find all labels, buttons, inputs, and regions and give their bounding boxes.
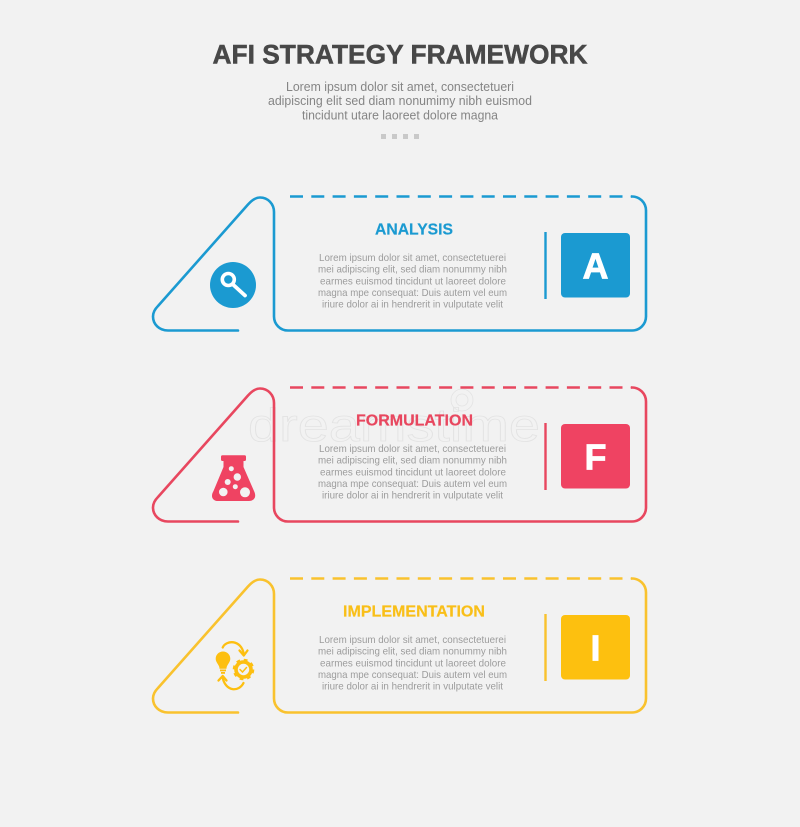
panel: implementation — [153, 578, 646, 712]
analysis heading: ANALYSIS — [375, 222, 453, 238]
implementation text: iriure dolor ai in hendrerit in vulputate velit — [322, 680, 503, 692]
formulation text — [318, 443, 507, 502]
analysis letter badge — [561, 233, 630, 298]
panel: analysis — [153, 196, 646, 330]
analysis text: magna mpe consequat: Duis autem vel eum — [318, 287, 507, 299]
icon: flask — [212, 455, 255, 501]
subtitle: tincidunt utare laoreet dolore magna — [302, 108, 498, 122]
formulation text: magna mpe consequat: Duis autem vel eum — [318, 478, 507, 490]
icon: idea and gear cycle — [216, 642, 253, 689]
formulation heading: FORMULATION — [356, 412, 473, 430]
implementation letter badge — [561, 615, 630, 680]
formulation text: earmes euismod tincidunt ut laoreet dolore — [320, 466, 506, 478]
implementation text: earmes euismod tincidunt ut laoreet dolore — [320, 658, 506, 670]
analysis text: Lorem ipsum dolor sit amet, consectetuerei — [319, 252, 506, 264]
analysis text: earmes euismod tincidunt ut laoreet dolore — [320, 276, 506, 288]
subtitle: Lorem ipsum dolor sit amet, consectetueri — [286, 80, 514, 94]
title ornament dots — [381, 134, 419, 139]
formulation divider — [544, 423, 547, 490]
icon: magnifying glass — [210, 262, 256, 308]
watermark: dreamstime — [248, 399, 540, 451]
subtitle: adipiscing elit sed diam nonumimy nibh euismod — [268, 94, 532, 108]
watermark — [248, 389, 540, 451]
subtitle — [268, 80, 532, 122]
implementation text: mei adipiscing elit, sed diam nonummy nibh — [318, 646, 507, 658]
implementation letter badge: I — [590, 628, 601, 668]
analysis text — [318, 252, 507, 310]
implementation text — [318, 634, 507, 692]
formulation text: iriure dolor ai in hendrerit in vulputate velit — [322, 490, 503, 502]
formulation outline — [153, 388, 646, 522]
formulation text: Lorem ipsum dolor sit amet, consectetuerei — [319, 443, 506, 455]
implementation divider — [544, 614, 547, 681]
formulation text: mei adipiscing elit, sed diam nonummy nibh — [318, 454, 507, 466]
cycle arrows — [218, 642, 248, 689]
formulation letter badge: F — [584, 436, 606, 478]
bulb — [216, 652, 230, 674]
gear — [234, 660, 253, 679]
implementation heading: IMPLEMENTATION — [343, 604, 485, 620]
analysis text: iriure dolor ai in hendrerit in vulputate velit — [322, 298, 503, 310]
analysis letter badge: A — [582, 246, 608, 286]
formulation letter badge — [561, 424, 630, 488]
title: AFI STRATEGY FRAMEWORK — [212, 39, 588, 69]
implementation outline — [153, 578, 646, 712]
panel: formulation — [153, 388, 646, 522]
analysis text: mei adipiscing elit, sed diam nonummy nibh — [318, 264, 507, 276]
analysis outline — [153, 196, 646, 330]
implementation text: Lorem ipsum dolor sit amet, consectetuerei — [319, 634, 506, 646]
implementation text: magna mpe consequat: Duis autem vel eum — [318, 669, 507, 681]
analysis divider — [544, 232, 547, 299]
